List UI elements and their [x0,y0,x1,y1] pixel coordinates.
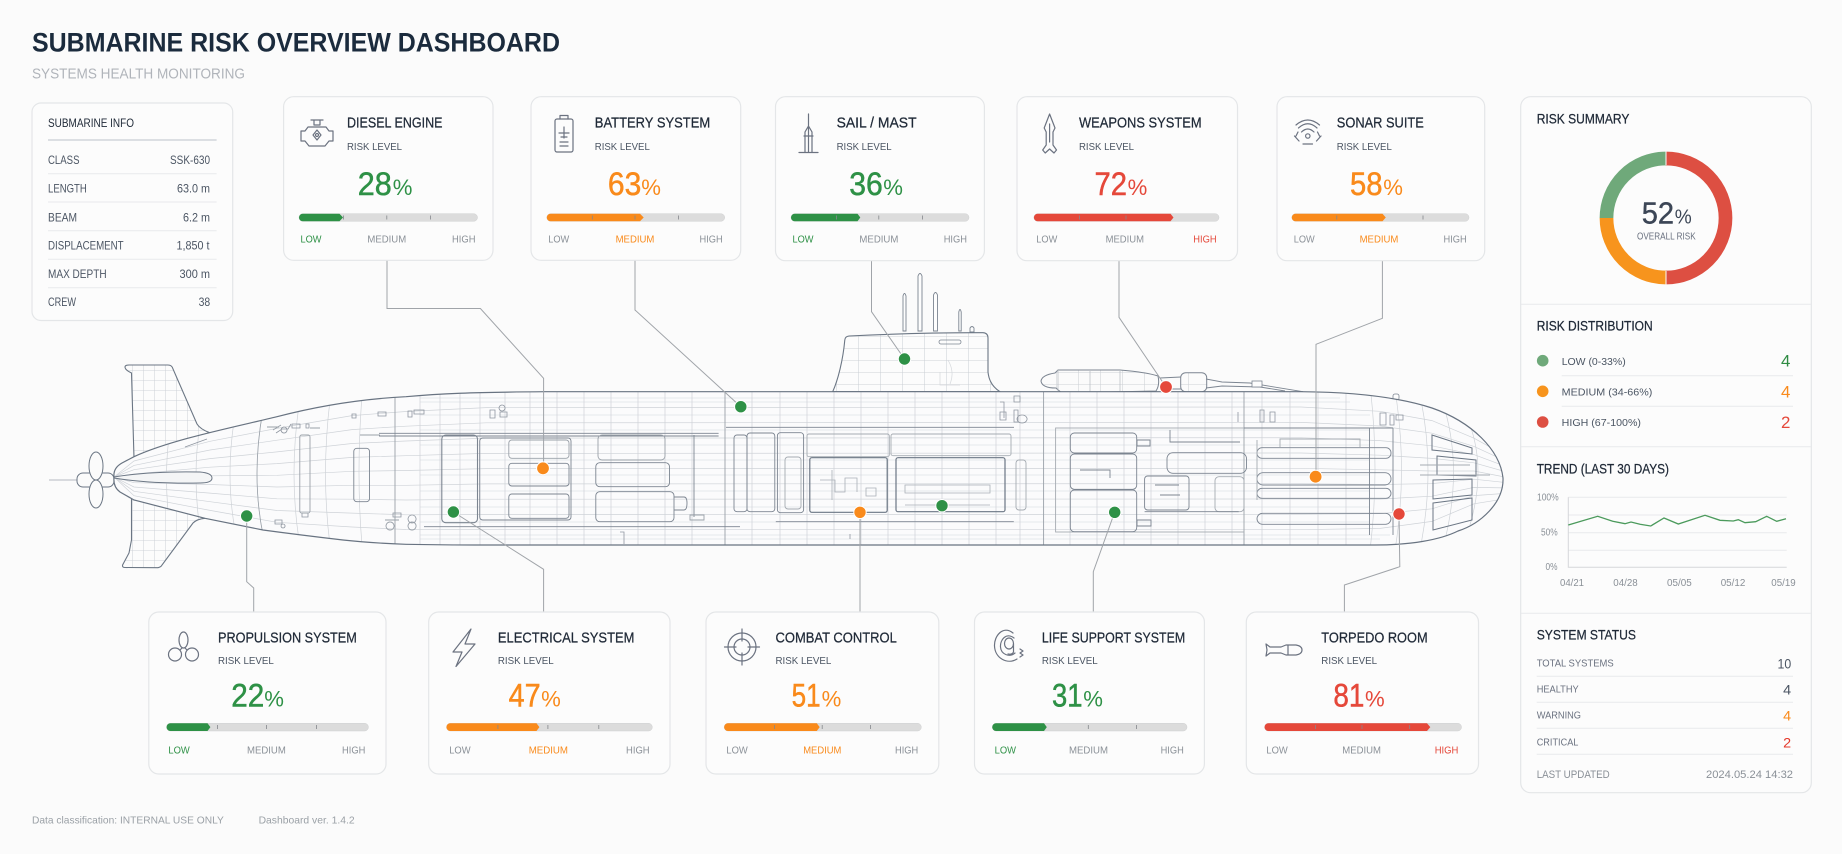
heading: ELECTRICAL SYSTEM [498,631,634,647]
scale labels: LOW [1036,234,1057,246]
trend line chart: 0% [1546,562,1558,573]
trend line chart: 50% [1541,528,1558,539]
risk value [608,166,661,202]
risk label: RISK LEVEL [837,141,892,153]
risk bar [791,214,969,221]
risk label: RISK LEVEL [776,655,831,667]
info rows: 6.2 m [183,210,210,224]
panel: propulsion system [149,612,386,774]
heading: WEAPONS SYSTEM [1079,115,1202,131]
system status rows [1537,655,1793,754]
distribution rows: HIGH (67-100%) [1562,417,1641,429]
system status rows: HEALTHY [1537,683,1579,695]
info rows: BEAM [48,210,77,224]
info rows: LENGTH [48,181,87,195]
system status rows: WARNING [1537,710,1581,722]
scale labels: LOW [1266,744,1288,756]
info rows: CREW [48,295,77,309]
info rows: SSK-630 [170,153,210,167]
forward compartments [1056,428,1490,535]
system status rows: 4 [1783,682,1791,698]
panel: life support system [974,612,1204,774]
scale labels: MEDIUM [1342,744,1381,756]
icon: battery [555,116,573,152]
hull ribs [166,392,1478,544]
icon: oxygen spiral [994,630,1023,661]
info rows: 300 m [180,267,210,281]
risk value: 51 [792,678,821,714]
hull fittings [185,396,1403,544]
risk bar [1265,723,1462,731]
footer: version: Dashboard ver. 1.4.2 [259,814,355,826]
donut value: % [1675,206,1692,228]
info heading: SUBMARINE INFO [48,116,134,130]
donut caption: OVERALL RISK [1637,231,1696,242]
heading: COMBAT CONTROL [776,631,897,647]
risk markers [240,353,1405,522]
heading: TORPEDO ROOM [1321,631,1428,647]
scale labels: LOW [792,234,814,246]
trend line chart: 05/12 [1721,578,1746,589]
risk value: 58 [1350,166,1382,202]
risk value: % [1365,687,1385,712]
scale labels [168,744,365,756]
aft compartments [267,425,740,530]
risk label: RISK LEVEL [1337,141,1392,153]
panel: weapons system [1017,97,1238,261]
trend heading: TREND (LAST 30 DAYS) [1537,461,1669,476]
last updated: LAST UPDATED [1537,769,1610,781]
submarine cutaway drawing [49,274,1510,568]
risk label: RISK LEVEL [595,141,650,153]
masts [903,274,974,332]
scale labels: MEDIUM [1360,234,1398,246]
scale labels: HIGH [895,744,918,756]
distribution rows: LOW (0-33%) [1562,356,1626,368]
panel: electrical system [429,612,670,774]
leader lines [247,260,1400,612]
panel: sonar suite [1277,97,1485,261]
risk value: % [1383,175,1403,200]
risk value [1350,166,1403,202]
hull longitudinal lines [114,398,1510,539]
info rows: MAX DEPTH [48,267,107,281]
risk value [1052,678,1103,714]
fins [122,365,210,568]
last updated: 2024.05.24 14:32 [1706,769,1793,781]
risk value: % [393,175,412,200]
scale labels: LOW [995,744,1016,756]
scale labels: HIGH [342,744,365,756]
heavy bulkheads [395,385,1244,550]
risk summary heading: RISK SUMMARY [1537,111,1629,126]
scale labels: LOW [449,744,471,756]
scale labels [548,234,723,246]
panel: diesel engine [284,97,493,260]
info rows: DISPLACEMENT [48,239,124,253]
distribution rows: 4 [1781,352,1790,371]
scale labels: LOW [1294,234,1315,246]
risk value: 47 [509,678,541,714]
scale labels: MEDIUM [1106,234,1144,246]
risk value: 28 [358,166,392,202]
panel: torpedo room [1246,612,1478,774]
risk bar [299,214,478,221]
scale labels [726,744,918,756]
icon: engine [301,120,333,146]
icon: torpedo [1266,644,1302,656]
system status rows: TOTAL SYSTEMS [1537,658,1614,670]
scale labels [1294,234,1467,246]
risk label: RISK LEVEL [218,655,274,667]
trend line chart: 04/21 [1560,578,1584,589]
scale labels: LOW [168,744,190,756]
risk value: % [1128,175,1147,200]
risk value: 22 [231,678,264,714]
scale labels: HIGH [1193,234,1217,246]
system status rows: 10 [1778,655,1791,671]
trend line chart: 05/19 [1771,578,1796,589]
sail [833,333,1000,392]
scale labels: MEDIUM [859,234,898,246]
risk value [1333,678,1385,714]
risk label: RISK LEVEL [1321,655,1377,667]
risk value: % [264,687,284,712]
scale labels: HIGH [452,234,476,246]
icon: sonar [1294,120,1321,144]
panel: battery system [531,97,741,260]
trend line chart: 04/28 [1613,578,1638,589]
scale labels: MEDIUM [247,744,286,756]
system status rows: CRITICAL [1537,736,1579,748]
info rows: 63.0 m [177,181,210,195]
subtitle: SYSTEMS HEALTH MONITORING [32,67,245,83]
risk value: 72 [1094,166,1127,202]
icon: mast [799,114,818,152]
hull [113,391,1504,546]
stabilizer [114,472,212,483]
risk label: RISK LEVEL [498,655,554,667]
risk value [358,166,412,202]
risk label: RISK LEVEL [1042,655,1098,667]
propeller [49,452,114,508]
info rows: CLASS [48,153,80,167]
upper housing [1041,370,1399,400]
scale labels: MEDIUM [616,234,654,246]
risk bar [1292,214,1469,221]
risk distribution heading: RISK DISTRIBUTION [1537,319,1653,334]
info rows: 1,850 t [176,239,210,253]
scale labels: HIGH [626,744,650,756]
system status rows: 4 [1783,708,1791,724]
scale labels: HIGH [944,234,967,246]
risk bar [992,723,1187,731]
risk value: 31 [1052,678,1082,714]
info rows [48,153,210,309]
scale labels: LOW [548,234,569,246]
mid compartments [726,427,1026,522]
scale labels [792,234,967,246]
donut value [1642,195,1692,230]
info rows: 38 [199,295,210,309]
risk value [1094,166,1147,202]
heading: DIESEL ENGINE [347,115,443,131]
panel: combat control [706,612,939,774]
heading: BATTERY SYSTEM [595,115,710,131]
scale labels: HIGH [1444,234,1467,246]
risk label: RISK LEVEL [1079,141,1134,153]
scale labels: HIGH [700,234,723,246]
system status rows: 2 [1783,735,1791,751]
scale labels [449,744,650,756]
donut chart [1606,152,1726,284]
heading: SONAR SUITE [1337,115,1424,131]
heading: LIFE SUPPORT SYSTEM [1042,631,1185,647]
last updated [1537,769,1793,781]
risk value: % [541,687,561,712]
distribution rows: MEDIUM (34-66%) [1562,386,1652,398]
trend line chart [1537,493,1796,589]
panel: risk sidebar [1521,97,1811,793]
risk value: % [883,175,903,200]
icon: missile [1043,114,1056,153]
scale labels: MEDIUM [1069,744,1108,756]
risk bar [446,723,652,731]
footer: classification: Data classification: INTERNAL USE ONLY [32,814,224,826]
risk value: % [641,175,661,200]
heading: SAIL / MAST [837,115,917,131]
trend line chart: 05/05 [1667,578,1692,589]
distribution rows [1537,352,1793,432]
risk value: % [822,687,841,712]
panel: sail / mast [776,97,984,261]
scale labels: LOW [300,234,322,246]
risk value: 81 [1333,678,1364,714]
icon: crosshair [724,629,760,665]
risk value [509,678,561,714]
risk value: % [1083,687,1103,712]
scale labels: LOW [726,744,748,756]
scale labels [995,744,1184,756]
distribution rows: 4 [1781,383,1790,402]
donut value: 52 [1642,195,1674,230]
icon: propeller [168,632,198,661]
scale labels: HIGH [1435,744,1458,756]
risk bar [724,723,921,731]
risk bar [167,723,368,731]
scale labels [1036,234,1217,246]
risk value [849,166,903,202]
trend line chart: 100% [1537,493,1559,504]
system status heading: SYSTEM STATUS [1537,627,1636,642]
risk value [231,678,284,714]
icon: lightning bolt [453,629,475,666]
risk value: 36 [849,166,883,202]
heading: PROPULSION SYSTEM [218,631,357,647]
title: SUBMARINE RISK OVERVIEW DASHBOARD [32,28,560,58]
risk label: RISK LEVEL [347,141,402,153]
scale labels [1266,744,1458,756]
scale labels: MEDIUM [367,234,406,246]
panel: submarine info [32,103,233,320]
scale labels: MEDIUM [529,744,568,756]
scale labels: MEDIUM [803,744,841,756]
scale labels [300,234,476,246]
risk value: 63 [608,166,641,202]
risk bar [1034,214,1219,221]
distribution rows: 2 [1781,413,1790,432]
risk bar [547,214,725,221]
scale labels: HIGH [1161,744,1184,756]
